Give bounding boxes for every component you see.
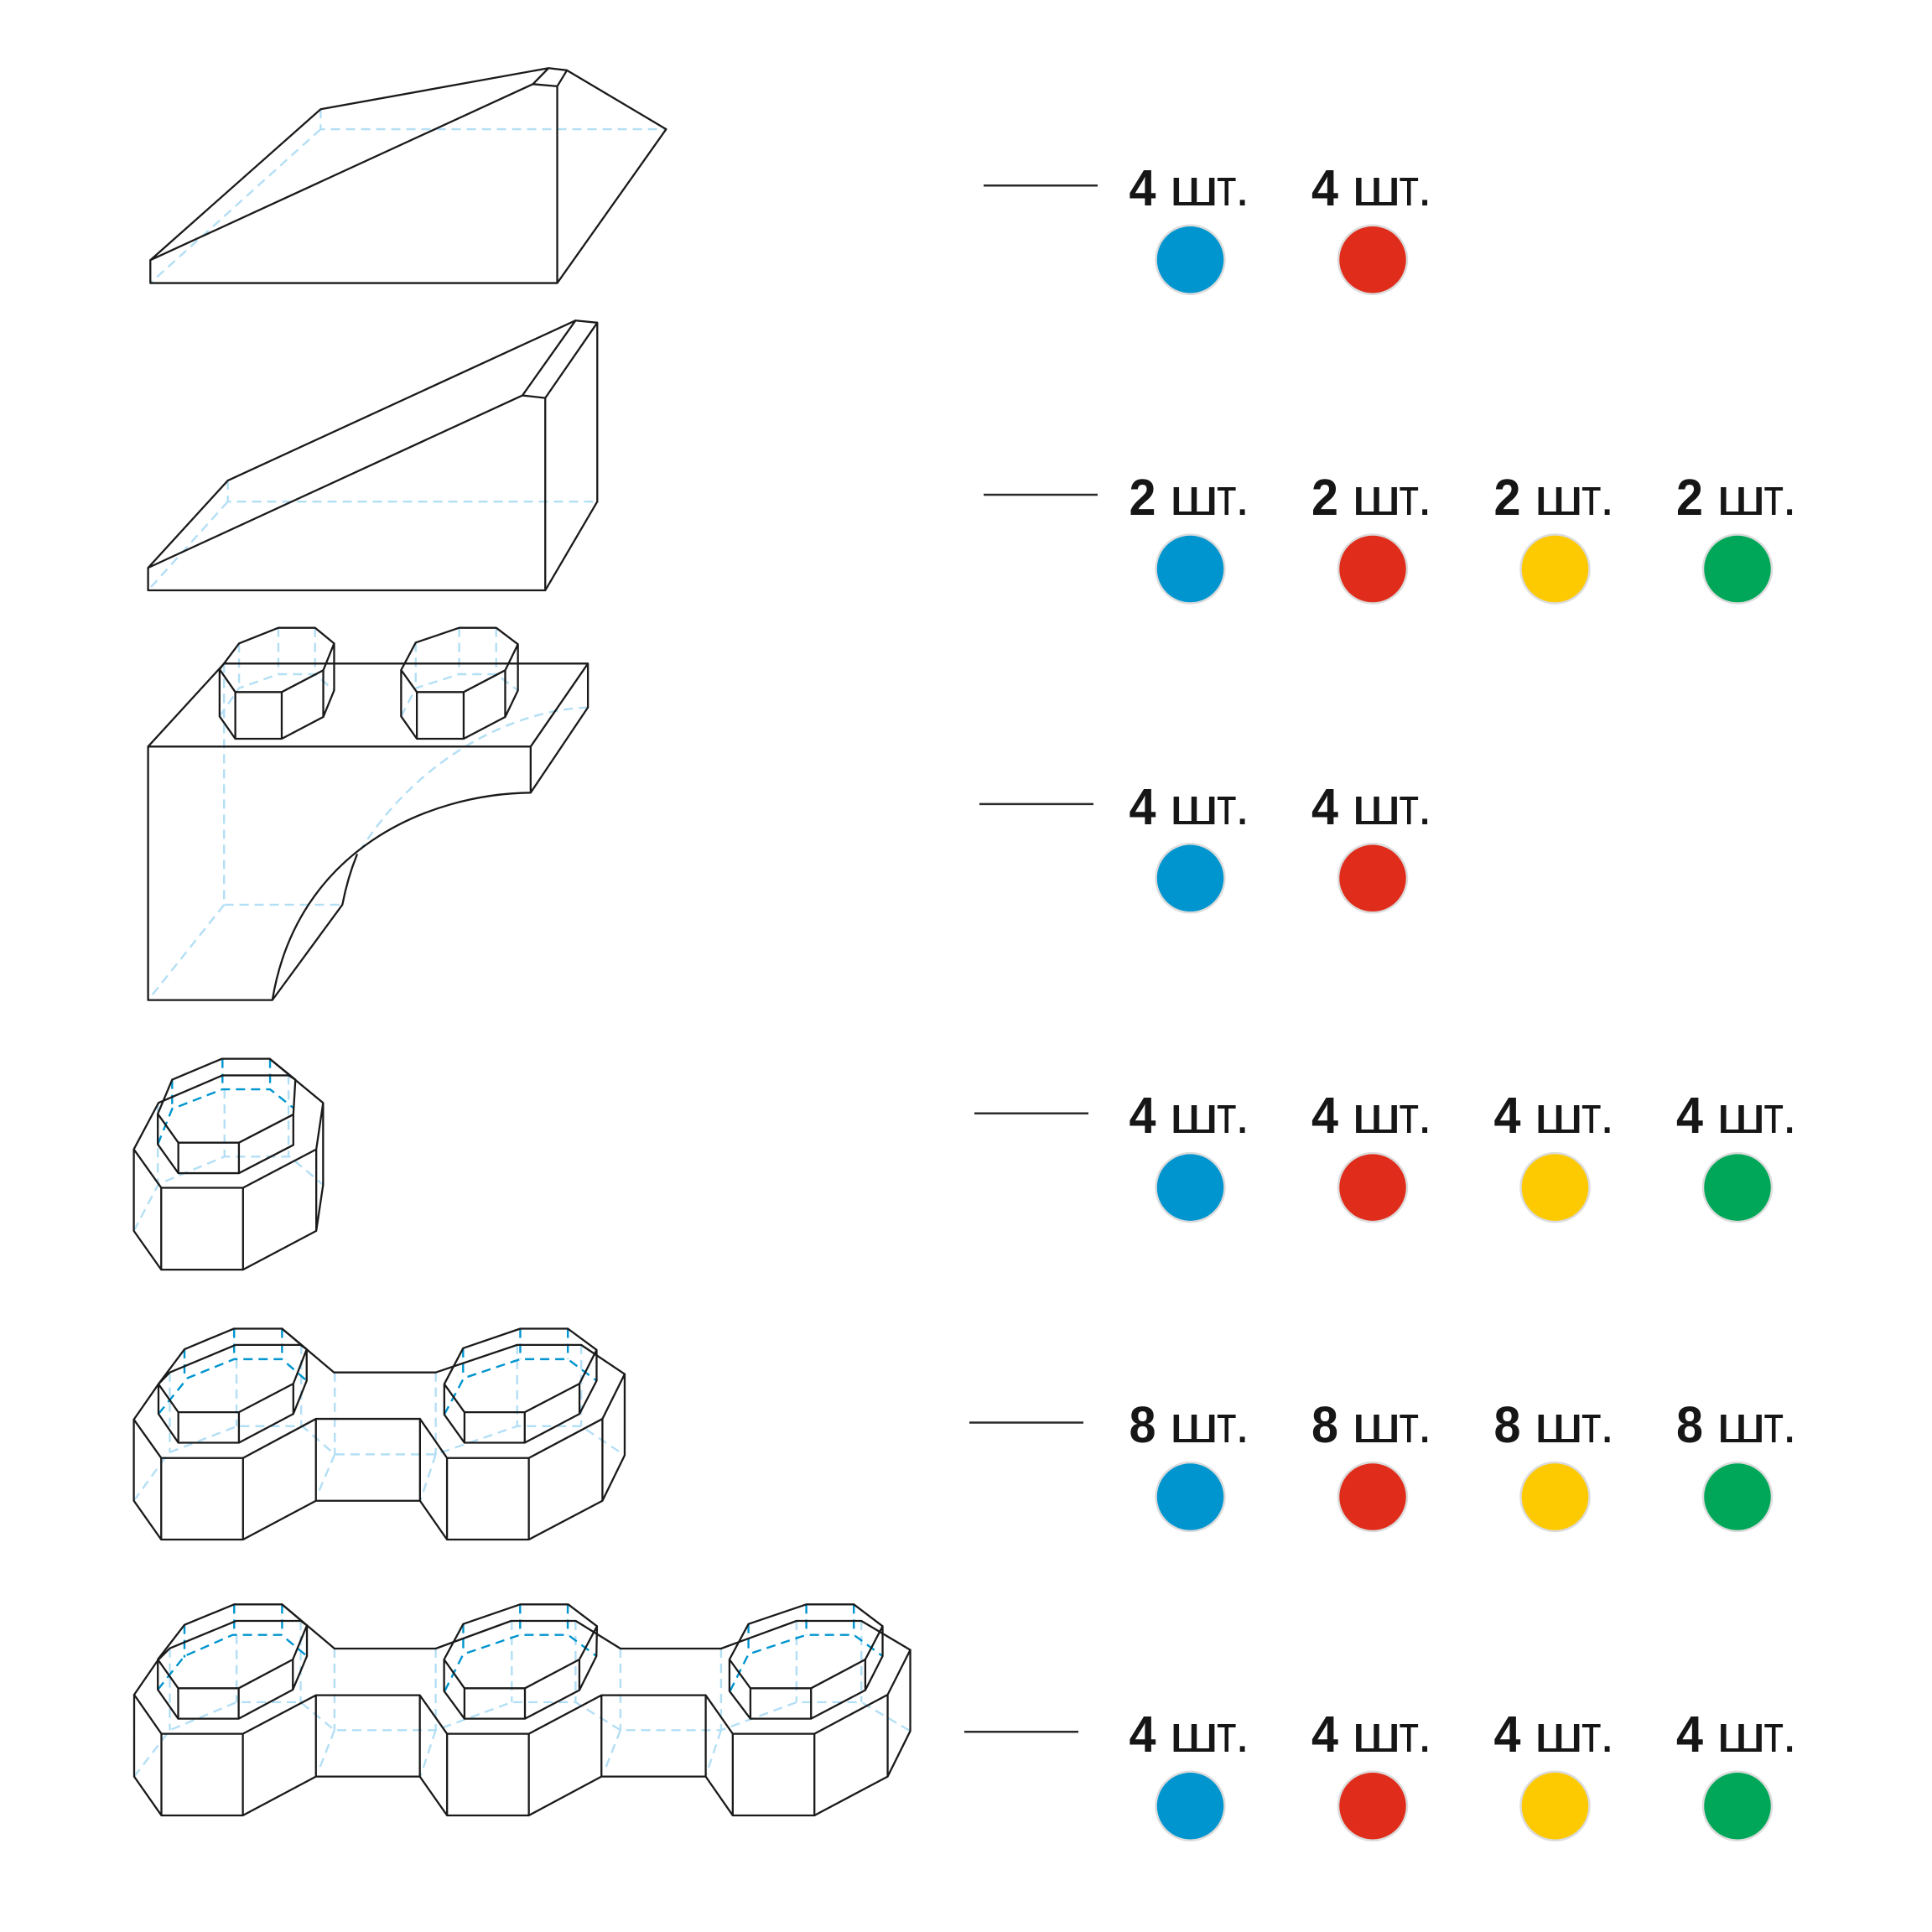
quantity: blue: ш bbox=[1169, 1396, 1219, 1454]
quantity: red: т bbox=[1399, 159, 1419, 217]
shape 5: double brick with two studs bbox=[134, 1329, 625, 1540]
quantity: green: . bbox=[1783, 1396, 1797, 1454]
quantity: red: ш bbox=[1352, 1396, 1401, 1454]
quantity: blue: . bbox=[1235, 469, 1249, 527]
leader line bbox=[969, 1421, 1083, 1424]
quantity: green: т bbox=[1764, 1706, 1784, 1763]
quantity: yellow: 4 bbox=[1494, 1706, 1521, 1763]
quantity: red: т bbox=[1399, 1396, 1419, 1454]
quantity: yellow bbox=[1494, 1706, 1614, 1841]
quantity: yellow: ш bbox=[1535, 1087, 1583, 1145]
quantity: green: 8 bbox=[1676, 1396, 1703, 1453]
quantity: red: . bbox=[1417, 1396, 1432, 1454]
quantity: blue: т bbox=[1217, 1706, 1236, 1763]
quantity: green: ш bbox=[1716, 1706, 1766, 1763]
quantity: red: 4 bbox=[1311, 1706, 1338, 1763]
quantity: green: т bbox=[1764, 1087, 1784, 1145]
quantity: green: т bbox=[1764, 469, 1784, 527]
quantity: green bbox=[1676, 469, 1797, 604]
row 6: quantities bbox=[964, 1706, 1797, 1841]
quantity: red: . bbox=[1417, 159, 1432, 217]
quantity: blue: . bbox=[1235, 1396, 1249, 1454]
quantity: yellow: 2 bbox=[1494, 469, 1521, 526]
quantity: green: . bbox=[1783, 1706, 1797, 1763]
quantity: yellow: . bbox=[1600, 1087, 1614, 1145]
quantity: blue: . bbox=[1235, 1087, 1249, 1145]
quantity: green bbox=[1676, 1706, 1797, 1841]
leader line bbox=[984, 184, 1098, 187]
quantity: blue bbox=[1129, 159, 1249, 294]
quantity: yellow bbox=[1494, 1396, 1614, 1531]
row 2: quantities bbox=[984, 469, 1797, 604]
quantity: red: ш bbox=[1352, 1706, 1401, 1763]
row 3: quantities bbox=[979, 778, 1432, 912]
quantity: blue bbox=[1129, 1706, 1249, 1841]
leader line bbox=[984, 494, 1098, 496]
quantity: red: т bbox=[1399, 778, 1419, 836]
quantity: red: 2 bbox=[1311, 469, 1338, 526]
quantity: blue bbox=[1129, 469, 1249, 604]
quantity: green: ш bbox=[1716, 1396, 1766, 1454]
quantity: red: т bbox=[1399, 469, 1419, 527]
quantity: yellow: 8 bbox=[1494, 1396, 1521, 1453]
quantity: red: 8 bbox=[1311, 1396, 1338, 1453]
quantity: blue bbox=[1129, 1087, 1249, 1222]
quantity: blue: . bbox=[1235, 1706, 1249, 1763]
quantity: yellow: т bbox=[1581, 469, 1602, 527]
quantity: green: . bbox=[1783, 469, 1797, 527]
quantity: blue: 4 bbox=[1129, 1087, 1156, 1144]
leader line bbox=[974, 1112, 1088, 1114]
quantity: blue: ш bbox=[1169, 469, 1219, 527]
quantity: yellow: ш bbox=[1535, 1396, 1583, 1454]
quantity: blue: т bbox=[1217, 159, 1236, 217]
quantity: blue: 4 bbox=[1129, 1706, 1156, 1763]
quantity: blue: . bbox=[1235, 778, 1249, 836]
quantity: red: ш bbox=[1352, 469, 1401, 527]
quantity: green: 4 bbox=[1676, 1087, 1703, 1144]
quantity: blue: т bbox=[1217, 1087, 1236, 1145]
quantity: blue: ш bbox=[1169, 1087, 1219, 1145]
quantity: yellow: т bbox=[1581, 1706, 1602, 1763]
quantity: green: т bbox=[1764, 1396, 1784, 1454]
quantity: blue: . bbox=[1235, 159, 1249, 217]
shape 4: single round brick with one stud bbox=[134, 1059, 323, 1270]
quantity: red: т bbox=[1399, 1706, 1419, 1763]
quantity: red bbox=[1311, 1396, 1432, 1531]
quantity: green: 4 bbox=[1676, 1706, 1703, 1763]
leader line bbox=[964, 1731, 1078, 1733]
quantity: blue: ш bbox=[1169, 1706, 1219, 1763]
quantity: green: 2 bbox=[1676, 469, 1703, 526]
quantity: red: . bbox=[1417, 1706, 1432, 1763]
quantity: green bbox=[1676, 1396, 1797, 1531]
quantity: red bbox=[1311, 1706, 1432, 1841]
quantity: yellow: ш bbox=[1535, 1706, 1583, 1763]
quantity: blue: 4 bbox=[1129, 159, 1156, 216]
quantity: red: ш bbox=[1352, 1087, 1401, 1145]
quantity: red bbox=[1311, 469, 1432, 604]
quantity: yellow bbox=[1494, 1087, 1614, 1222]
quantity: red: . bbox=[1417, 469, 1432, 527]
quantity: red: 4 bbox=[1311, 159, 1338, 216]
quantity: green: ш bbox=[1716, 469, 1766, 527]
quantity: blue bbox=[1129, 778, 1249, 912]
quantity: red bbox=[1311, 159, 1432, 294]
quantity: blue bbox=[1129, 1396, 1249, 1531]
quantity: green: ш bbox=[1716, 1087, 1766, 1145]
quantity: red: ш bbox=[1352, 778, 1401, 836]
quantity: red: 4 bbox=[1311, 1087, 1338, 1144]
quantity: blue: т bbox=[1217, 1396, 1236, 1454]
quantity: red: 4 bbox=[1311, 778, 1338, 835]
quantity: yellow: . bbox=[1600, 1396, 1614, 1454]
quantity: green bbox=[1676, 1087, 1797, 1222]
quantity: yellow bbox=[1494, 469, 1614, 604]
quantity: red: ш bbox=[1352, 159, 1401, 217]
shape 2: long slope brick bbox=[148, 320, 597, 590]
shape 1: wedge brick with tapered top bbox=[150, 68, 666, 283]
quantity: red bbox=[1311, 778, 1432, 912]
quantity: blue: 2 bbox=[1129, 469, 1156, 526]
quantity: yellow: 4 bbox=[1494, 1087, 1521, 1144]
quantity: yellow: ш bbox=[1535, 469, 1583, 527]
quantity: red: т bbox=[1399, 1087, 1419, 1145]
quantity: blue: 8 bbox=[1129, 1396, 1156, 1453]
quantity: blue: т bbox=[1217, 778, 1236, 836]
quantity: blue: ш bbox=[1169, 159, 1219, 217]
leader line bbox=[979, 803, 1093, 805]
row 5: quantities bbox=[969, 1396, 1797, 1531]
row 4: quantities bbox=[974, 1087, 1797, 1222]
shape 3: curved arch brick with two studs bbox=[148, 628, 588, 1000]
quantity: yellow: т bbox=[1581, 1087, 1602, 1145]
quantity: blue: ш bbox=[1169, 778, 1219, 836]
quantity: yellow: . bbox=[1600, 469, 1614, 527]
quantity: red bbox=[1311, 1087, 1432, 1222]
row 1: quantities bbox=[984, 159, 1432, 294]
shape 6: triple brick with three studs bbox=[134, 1604, 911, 1815]
quantity: yellow: т bbox=[1581, 1396, 1602, 1454]
quantity: red: . bbox=[1417, 778, 1432, 836]
quantity: yellow: . bbox=[1600, 1706, 1614, 1763]
quantity: blue: т bbox=[1217, 469, 1236, 527]
quantity: red: . bbox=[1417, 1087, 1432, 1145]
quantity: green: . bbox=[1783, 1087, 1797, 1145]
quantity: blue: 4 bbox=[1129, 778, 1156, 835]
